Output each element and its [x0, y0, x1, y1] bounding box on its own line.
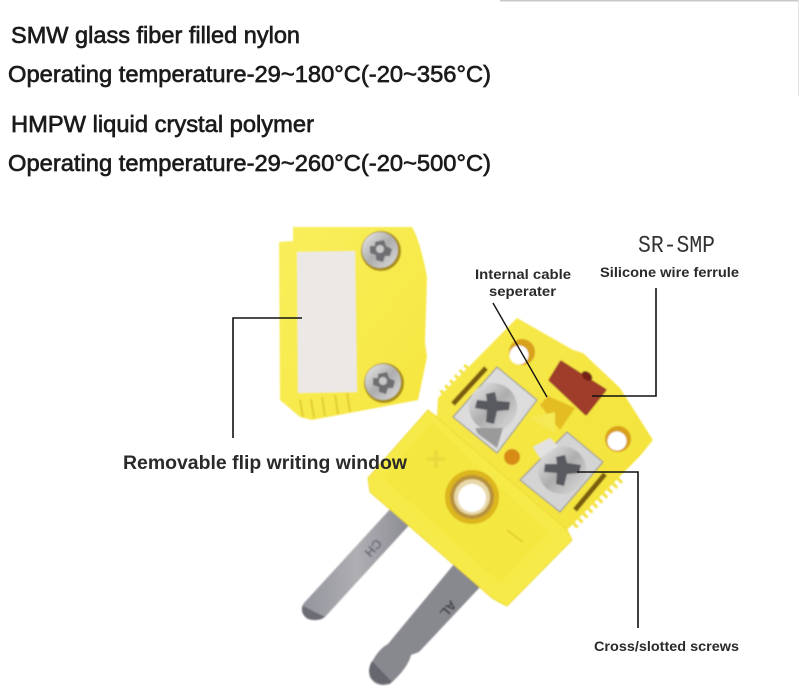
prong CH: [302, 506, 412, 619]
label: cross/slotted screws: Cross/slotted screws: [594, 638, 739, 654]
minus mark: [507, 530, 523, 542]
prong AL mark: AL: [437, 598, 460, 621]
prong AL: [369, 563, 482, 685]
label: removable flip writing window: Removable flip writing window: [123, 453, 407, 474]
upper terminal screw: [453, 367, 537, 453]
label: silicone wire ferrule: Silicone wire ferrule: [600, 264, 739, 280]
label: SR-SMP: SR-SMP: [638, 233, 715, 260]
mounting hole right: [605, 426, 631, 452]
lid panel: [368, 410, 572, 606]
cover body: [279, 227, 427, 420]
heading block: SMW material: Operating temperature-29~180°C(-20~356°C): [8, 61, 491, 87]
housing edge notches: [442, 364, 622, 526]
brass eyelet: [445, 470, 499, 524]
cover screw bottom: [364, 363, 404, 403]
lower terminal screw: [520, 432, 605, 512]
cable separator: [530, 396, 575, 433]
label: internal cable separator: Internal cable: [475, 266, 571, 282]
heading block: SMW material: [8, 22, 491, 87]
small orange hole: [504, 449, 520, 465]
removable cover: [279, 227, 427, 420]
cover ridges: [300, 393, 350, 418]
heading block: SMW material: SMW glass fiber filled nylon: [11, 22, 300, 48]
heading block: HMPW material: Operating temperature-29~260°C(-20~500°C): [8, 150, 491, 176]
prong CH mark: CH: [361, 536, 385, 560]
leader: writing window: [233, 318, 302, 438]
silicone ferrule: [550, 362, 605, 414]
connector prongs: [302, 506, 482, 685]
prong AL tip: [369, 661, 392, 684]
connector body: [368, 318, 653, 606]
mounting hole top: [509, 339, 535, 365]
leader: ferrule: [592, 288, 656, 396]
heading block: HMPW material: HMPW liquid crystal polymer: [11, 111, 314, 137]
leader: cable separator: [493, 303, 547, 397]
label: internal cable separator: [475, 266, 571, 299]
label: internal cable separator: seperater: [489, 283, 557, 299]
prong CH tip: [302, 606, 325, 620]
cover screw top: [361, 231, 401, 271]
heading block: HMPW material: [8, 111, 491, 176]
lid recess: [383, 422, 548, 583]
writing window: [297, 251, 357, 393]
plus mark: [427, 450, 445, 468]
leader: screws: [577, 472, 638, 628]
top right frame line: [500, 0, 799, 96]
yellow housing: [368, 318, 653, 606]
